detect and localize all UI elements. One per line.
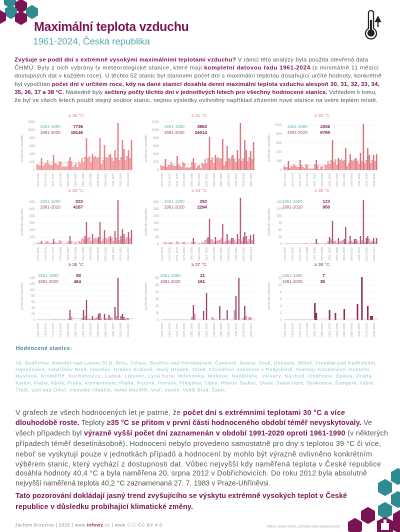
chart: days at or above 34 °C: 1991-2020 xyxy=(164,204,185,210)
chart: days at or above 36 °C: 120 xyxy=(29,282,35,286)
chart: days at or above 33 °C: 2001-2005 xyxy=(96,247,100,261)
chart: days at or above 31 °C: 1966-1970 xyxy=(167,173,171,187)
chart: days at or above 36 °C: 2016-2020 xyxy=(118,323,122,337)
chart: days at or above 37 °C: 50 xyxy=(155,283,159,287)
chart: days at or above 32 °C: 2016-2020 xyxy=(364,173,368,187)
chart: days at or above 38 °C: 2011-2015 xyxy=(357,323,361,337)
chart: days at or above 36 °C: 140 xyxy=(29,276,35,280)
chart: days at or above 31 °C: 1991-2020 xyxy=(164,130,185,135)
chart: days at or above 31 °C: 2021-2024 xyxy=(249,173,253,187)
chart: days at or above 32 °C: 2008 xyxy=(320,124,331,129)
chart: days at or above 34 °C: 1991-1995 xyxy=(204,247,208,261)
chart: days at or above 32 °C: 1971-1975 xyxy=(298,173,302,187)
stations heading: Hodnocené stanice: xyxy=(16,346,72,352)
chart: days at or above 38 °C: 2016-2020 xyxy=(364,323,368,337)
chart: days at or above 38 °C: počet dní (součet) xyxy=(267,282,271,310)
chart: days at or above 35 °C: 125 xyxy=(276,207,282,211)
chart: days at or above 37 °C: 1991-1995 xyxy=(204,323,208,337)
chart: days at or above 35 °C: 150 xyxy=(276,200,282,204)
chart: days at or above 34 °C: 150 xyxy=(153,221,159,225)
chart: days at or above 31 °C: počet dní (součet) xyxy=(144,134,148,162)
chart: days at or above 34 °C: 1961-1990 xyxy=(164,199,185,204)
stations list: Aš, Bedřichov, Brandýs nad Labem-St.B, Brno, Tuřany, Bystřice nad Pernštejnem, Čeminné, Desná, Souš, Doksany, Dříteč, Frenštát pod Radhoštěm, xyxy=(16,360,376,366)
chart: days at or above 34 °C: 1971-1975 xyxy=(175,247,179,261)
chart: days at or above 36 °C: 1961-1965 xyxy=(36,323,40,337)
chart: days at or above 33 °C: 2006-2010 xyxy=(104,247,108,261)
chart: days at or above 35 °C: 1971-1975 xyxy=(298,247,302,261)
chart: days at or above 37 °C: 161 xyxy=(198,279,206,284)
chart: days at or above 33 °C: 1986-1990 xyxy=(74,247,78,261)
title: Maximální teplota vzduchu xyxy=(34,20,189,34)
chart: days at or above 30 °C: 1986-1990 xyxy=(74,173,78,187)
intro text block: ČHMÚ. Byly z nich vybrány ty meteorologické stanice, které mají kompletní datovou řadu 1961-2024 (s minimálně 11 měsíci xyxy=(14,64,378,72)
chart: days at or above 33 °C: ≥ 33 °C xyxy=(68,188,84,193)
chart: days at or above 34 °C: 1961-1965 xyxy=(160,247,164,261)
chart: days at or above 32 °C: 1966-1970 xyxy=(290,173,294,187)
conclusions text block: dosáhla hodnoty 40,4 °C a byla naměřena 20. srpna 2012 v Dobřichovicích. Do roku 2012 byla absolutně xyxy=(16,469,367,478)
chart: days at or above 38 °C: 1976-1980 xyxy=(305,323,309,337)
chart: days at or above 31 °C: 1200 xyxy=(152,120,159,124)
chart: days at or above 38 °C: 0 xyxy=(280,318,282,322)
closing statement: Tato pozorování dokládají jasný trend zvyšujícího se výskytu extrémně vysokých teplot v České xyxy=(16,491,347,500)
chart: days at or above 30 °C: 2006-2010 xyxy=(104,173,108,187)
chart: days at or above 33 °C: 922 xyxy=(76,199,84,204)
chart: days at or above 37 °C: 30 xyxy=(155,297,159,301)
chart: days at or above 35 °C: 1991-2020 xyxy=(282,204,303,210)
chart: days at or above 38 °C: 1961-1990 xyxy=(282,273,303,278)
chart: days at or above 36 °C: 1991-2020 xyxy=(38,279,59,284)
chart: days at or above 35 °C: 1976-1980 xyxy=(305,247,309,261)
chart: days at or above 33 °C: počet dní (součet) xyxy=(20,208,24,236)
chart: days at or above 30 °C: 7736 xyxy=(73,124,84,129)
chart: days at or above 31 °C: 1976-1980 xyxy=(182,173,186,187)
chart: days at or above 31 °C: 2011-2015 xyxy=(234,173,238,187)
chart: days at or above 38 °C: 12 xyxy=(278,276,282,280)
chart: days at or above 36 °C: 2001-2005 xyxy=(96,323,100,337)
chart: days at or above 35 °C: 1961-1990 xyxy=(282,199,303,204)
chart: days at or above 31 °C: 1961-1990 xyxy=(164,124,185,129)
intro text block: že byl ve všech letech použit stejný soubor stanic, nejsou výsledky ovlivněny například zřízením nové stanice na velmi teplém místě. xyxy=(14,98,378,104)
chart: days at or above 36 °C: 1986-1990 xyxy=(74,323,78,337)
chart: days at or above 38 °C: 1991-2020 xyxy=(282,279,303,284)
chart: days at or above 37 °C: 1976-1980 xyxy=(182,323,186,337)
chart: days at or above 34 °C: 2021-2024 xyxy=(249,247,253,261)
chart: days at or above 37 °C: 40 xyxy=(155,290,159,294)
chart: days at or above 31 °C: 1986-1990 xyxy=(197,173,201,187)
intro text block xyxy=(14,58,382,104)
chart: days at or above 30 °C: 800 xyxy=(29,136,35,140)
chart: days at or above 38 °C: 35 xyxy=(320,279,326,284)
chart: days at or above 32 °C: 200 xyxy=(276,159,282,163)
chart: days at or above 31 °C: 1996-2000 xyxy=(212,173,216,187)
intro text block: dostupných dat v každém roce). U těchto 52 stanic byl stanoven počet dní s maximální teplotou dosahující určité hodnoty, konkrétně xyxy=(14,74,382,80)
chart: days at or above 30 °C: 2021-2024 xyxy=(126,173,130,187)
chart: days at or above 32 °C: 600 xyxy=(276,141,282,145)
chart: days at or above 37 °C: počet dní (součet) xyxy=(144,282,148,310)
chart: days at or above 35 °C: počet dní (součet) xyxy=(267,208,271,236)
chart: days at or above 32 °C: 2006-2010 xyxy=(350,173,354,187)
chart: days at or above 38 °C: 1986-1990 xyxy=(320,323,324,337)
chart: days at or above 30 °C: ≥ 30 °C xyxy=(68,113,84,118)
chart: days at or above 33 °C: 300 xyxy=(29,221,35,225)
chart: days at or above 34 °C xyxy=(144,188,255,261)
chart: days at or above 35 °C: 956 xyxy=(323,204,331,210)
chart: days at or above 35 °C: 1986-1990 xyxy=(320,247,324,261)
chart: days at or above 32 °C: počet dní (součet) xyxy=(267,134,271,162)
chart: days at or above 30 °C: 400 xyxy=(29,152,35,156)
chart: days at or above 37 °C: 2001-2005 xyxy=(219,323,223,337)
chart: days at or above 36 °C: 60 xyxy=(31,300,35,304)
chart: days at or above 35 °C: 1966-1970 xyxy=(290,247,294,261)
chart: days at or above 36 °C: 2011-2015 xyxy=(111,323,115,337)
chart: days at or above 34 °C: 100 xyxy=(153,228,159,232)
chart: days at or above 30 °C: 2001-2005 xyxy=(96,173,100,187)
chart: days at or above 32 °C: 1991-2020 xyxy=(287,130,308,135)
chart: days at or above 33 °C: 1961-1990 xyxy=(40,199,61,204)
chart: days at or above 32 °C: 1981-1985 xyxy=(313,173,317,187)
stations list: Karlov, Praha, Kbely, Praha, Klementinum, Praha, Ruzyně, Pernink, Přibyslav, Tábor, Přerov, Sedlec, Slané, Svatá Hora, Strakonice, Šumperk, Tábor, xyxy=(16,380,375,386)
hexagon cluster top left xyxy=(0,0,38,25)
chart: days at or above 34 °C: 200 xyxy=(153,214,159,218)
conclusions text block: neboť se vyskytují pouze v jednotkách případů a hodnocení by mohlo být výrazně ovlivněno konkrétním xyxy=(16,449,372,458)
chart: days at or above 31 °C: 400 xyxy=(153,152,159,156)
chart: days at or above 34 °C: 1996-2000 xyxy=(212,247,216,261)
chart: days at or above 33 °C: 100 xyxy=(29,235,35,239)
chart: days at or above 35 °C: ≥ 35 °C xyxy=(314,188,330,193)
chart: days at or above 35 °C: 100 xyxy=(276,214,282,218)
chart: days at or above 33 °C: 600 xyxy=(29,200,35,204)
chart: days at or above 32 °C: 2001-2005 xyxy=(342,173,346,187)
chart: days at or above 31 °C: 0 xyxy=(157,168,159,172)
chart: days at or above 32 °C: 2011-2015 xyxy=(357,173,361,187)
chart: days at or above 35 °C: 1981-1985 xyxy=(313,247,317,261)
chart: days at or above 32 °C xyxy=(267,113,378,187)
chart: days at or above 34 °C: 2006-2010 xyxy=(227,247,231,261)
chart: days at or above 38 °C: 6 xyxy=(280,297,282,301)
chart: days at or above 36 °C: ≥ 36 °C xyxy=(68,262,84,267)
chart: days at or above 37 °C: 1996-2000 xyxy=(212,323,216,337)
chart: days at or above 31 °C: 800 xyxy=(153,136,159,140)
chart: days at or above 30 °C: počet dní (součet) xyxy=(20,134,24,162)
chart: days at or above 34 °C: 2001-2005 xyxy=(219,247,223,261)
chart: days at or above 34 °C: počet dní (součet) xyxy=(144,208,148,236)
chart: days at or above 38 °C: 1996-2000 xyxy=(335,323,339,337)
chart: days at or above 31 °C: 1961-1965 xyxy=(160,173,164,187)
chart: days at or above 37 °C: 1991-2020 xyxy=(160,279,181,284)
chart: days at or above 36 °C: 20 xyxy=(31,312,35,316)
chart: days at or above 37 °C: 0 xyxy=(157,318,159,322)
chart: days at or above 33 °C: 1996-2000 xyxy=(88,247,92,261)
chart: days at or above 37 °C: 20 xyxy=(155,304,159,308)
intro text block: 35, 36, 37 a 38 °C. Následně byly sečteny počty těchto dní v jednotlivých letech pro všechny hodnocené stanice. Vzhledem k tomu, xyxy=(14,90,377,96)
chart: days at or above 37 °C: ≥ 37 °C xyxy=(191,262,207,267)
chart: days at or above 37 °C: 21 xyxy=(200,273,206,278)
conclusions text block xyxy=(16,408,388,488)
chart: days at or above 31 °C: 3963 xyxy=(197,124,208,129)
chart: days at or above 32 °C: 1991-1995 xyxy=(327,173,331,187)
chart: days at or above 33 °C: 2016-2020 xyxy=(118,247,122,261)
chart: days at or above 36 °C xyxy=(20,262,133,337)
stations list xyxy=(16,360,376,393)
chart: days at or above 34 °C: 1981-1985 xyxy=(190,247,194,261)
chart: days at or above 36 °C: 1966-1970 xyxy=(44,323,48,337)
hexagon cluster bottom right xyxy=(348,468,400,532)
chart: days at or above 35 °C: 123 xyxy=(323,199,331,204)
icon: logo mark xyxy=(381,520,389,530)
chart: days at or above 32 °C: 800 xyxy=(276,132,282,136)
chart: days at or above 30 °C: 1981-1985 xyxy=(66,173,70,187)
chart: days at or above 30 °C: 1976-1980 xyxy=(58,173,62,187)
chart: days at or above 35 °C: 25 xyxy=(278,235,282,239)
chart: days at or above 31 °C: 2016-2020 xyxy=(241,173,245,187)
chart: days at or above 36 °C: počet dní (součet) xyxy=(20,282,24,310)
chart: days at or above 36 °C: 80 xyxy=(31,294,35,298)
chart: days at or above 36 °C: 1976-1980 xyxy=(58,323,62,337)
conclusions text block: výběrem stanic, který vychází z dostupnosti dat. Vůbec nejvyšší kdy naměřená teplota v České republice xyxy=(16,460,381,468)
chart: days at or above 30 °C: 600 xyxy=(29,144,35,148)
chart: days at or above 32 °C: 6769 xyxy=(320,130,331,135)
chart: days at or above 37 °C: 1961-1990 xyxy=(160,273,181,278)
chart: days at or above 33 °C: 400 xyxy=(29,214,35,218)
chart: days at or above 30 °C: 1000 xyxy=(28,128,35,132)
chart: days at or above 36 °C: 464 xyxy=(74,279,82,284)
chart: days at or above 35 °C: 1961-1965 xyxy=(283,247,287,261)
chart: days at or above 38 °C: 1991-1995 xyxy=(327,323,331,337)
chart: days at or above 30 °C: 1961-1965 xyxy=(36,173,40,187)
chart: days at or above 37 °C: 60 xyxy=(155,276,159,280)
chart: days at or above 31 °C: 2001-2005 xyxy=(219,173,223,187)
intro text block: byl vypočítán počet dní v určitém roce, kdy na dané stanici dosáhla denní maximální teplota vzduchu alespoň 30, 31, 32, 33, 34, xyxy=(14,82,380,88)
chart: days at or above 35 °C: 2021-2024 xyxy=(372,247,376,261)
chart: days at or above 35 °C: 2011-2015 xyxy=(357,247,361,261)
chart: days at or above 38 °C: 1966-1970 xyxy=(290,323,294,337)
chart: days at or above 37 °C: 10 xyxy=(155,311,159,315)
chart: days at or above 34 °C: 2016-2020 xyxy=(241,247,245,261)
chart: days at or above 32 °C: 1996-2000 xyxy=(335,173,339,187)
chart: days at or above 30 °C: 1961-1990 xyxy=(40,124,61,129)
chart: days at or above 35 °C: 0 xyxy=(280,242,282,246)
closing statement: republice v důsledku probíhající klimatické změny. xyxy=(16,502,193,511)
chart: days at or above 36 °C: 100 xyxy=(29,288,35,292)
chart: days at or above 33 °C: 1966-1970 xyxy=(44,247,48,261)
chart: days at or above 30 °C: 1991-2020 xyxy=(40,130,61,135)
chart: days at or above 33 °C: 1961-1965 xyxy=(36,247,40,261)
chart: days at or above 36 °C: 0 xyxy=(33,318,35,322)
chart: days at or above 31 °C: 200 xyxy=(153,160,159,164)
chart: days at or above 34 °C: ≥ 34 °C xyxy=(191,188,207,193)
chart: days at or above 36 °C: 1996-2000 xyxy=(88,323,92,337)
chart: days at or above 31 °C: 1000 xyxy=(152,128,159,132)
conclusions text block: dlouhodobě roste. Teploty ≥35 °C se přitom v první části hodnoceného období téměř nevyskytovaly. Ve xyxy=(16,418,372,427)
chart: days at or above 38 °C xyxy=(267,262,378,337)
chart: days at or above 33 °C xyxy=(20,188,133,261)
chart: days at or above 35 °C: 75 xyxy=(278,221,282,225)
chart: days at or above 37 °C: 2016-2020 xyxy=(241,323,245,337)
chart: days at or above 32 °C: 1961-1990 xyxy=(287,124,308,129)
chart: days at or above 31 °C: 16014 xyxy=(195,130,208,135)
chart: days at or above 33 °C: 4167 xyxy=(73,204,84,210)
chart: days at or above 33 °C: 500 xyxy=(29,207,35,211)
chart: days at or above 34 °C: 2011-2015 xyxy=(234,247,238,261)
chart: days at or above 33 °C: 1976-1980 xyxy=(58,247,62,261)
chart: days at or above 37 °C: 1966-1970 xyxy=(167,323,171,337)
chart: days at or above 33 °C: 1991-1995 xyxy=(81,247,85,261)
footer source url: https://www.chmi.cz/historicka-data/pocasi xyxy=(267,524,340,528)
chart: days at or above 31 °C: 600 xyxy=(153,144,159,148)
chart: days at or above 34 °C: 1986-1990 xyxy=(197,247,201,261)
stations list: Třešť, Ústí nad Orlicí, Vizovské Hřebčín, Velké Meziříčí, Vrať, Vsetín, Vyšší Brod, Žatec. xyxy=(16,385,227,393)
chart: days at or above 35 °C: 2001-2005 xyxy=(342,247,346,261)
chart: days at or above 31 °C: 1991-1995 xyxy=(204,173,208,187)
closing statement xyxy=(16,491,347,511)
chart: days at or above 34 °C: 2294 xyxy=(197,204,208,210)
chart: days at or above 36 °C: 50 xyxy=(76,273,82,278)
chart: days at or above 32 °C: 1976-1980 xyxy=(305,173,309,187)
chart: days at or above 32 °C: 1961-1965 xyxy=(283,173,287,187)
chart: days at or above 36 °C: 1971-1975 xyxy=(51,323,55,337)
chart: days at or above 35 °C: 1996-2000 xyxy=(335,247,339,261)
chart: days at or above 36 °C: 40 xyxy=(31,306,35,310)
chart: days at or above 38 °C: 8 xyxy=(280,290,282,294)
chart: days at or above 38 °C: 7 xyxy=(323,273,326,278)
conclusions text block: všech případech byl výrazně vyšší počet dní zaznamenán v období 1991-2020 oproti 1961-1990 (v některých xyxy=(16,429,388,438)
chart: days at or above 34 °C: 250 xyxy=(153,207,159,211)
footer credit: Jáchym Brzezina | 2025 | www.infoviz.cz | www ⓒⓘ CC BY 4.0 xyxy=(15,522,162,528)
chart: days at or above 38 °C: 10 xyxy=(278,283,282,287)
chart: days at or above 31 °C: 2006-2010 xyxy=(227,173,231,187)
chart: days at or above 32 °C: 400 xyxy=(276,150,282,154)
chart: days at or above 33 °C: 0 xyxy=(33,242,35,246)
chart: days at or above 30 °C: 19146 xyxy=(71,130,84,135)
chart: days at or above 32 °C: 1986-1990 xyxy=(320,173,324,187)
chart: days at or above 30 °C: 2011-2015 xyxy=(111,173,115,187)
chart: days at or above 38 °C: 1971-1975 xyxy=(298,323,302,337)
chart: days at or above 30 °C: 0 xyxy=(33,168,35,172)
chart: days at or above 37 °C: 1986-1990 xyxy=(197,323,201,337)
chart: days at or above 36 °C: 1981-1985 xyxy=(66,323,70,337)
chart: days at or above 34 °C: 0 xyxy=(157,242,159,246)
chart: days at or above 37 °C: 1961-1965 xyxy=(160,323,164,337)
intro text block: Zvyšuje se podíl dní s extrémně vysokými maximálními teplotami vzduchu? V rámci této analýzy byla použita otevřená data xyxy=(14,58,369,64)
chart: days at or above 36 °C: 2021-2024 xyxy=(126,323,130,337)
chart: days at or above 38 °C: 1981-1985 xyxy=(313,323,317,337)
chart: days at or above 31 °C: 1981-1985 xyxy=(190,173,194,187)
chart: days at or above 37 °C: 2011-2015 xyxy=(234,323,238,337)
chart: days at or above 34 °C: 50 xyxy=(155,235,159,239)
chart: days at or above 35 °C: 1991-1995 xyxy=(327,247,331,261)
chart: days at or above 38 °C: ≥ 38 °C xyxy=(314,262,330,267)
chart: days at or above 38 °C: 2001-2005 xyxy=(342,323,346,337)
stations list: Myslová, Kroměříž, Kuchařovice, Ladná, Liberec, Lysá hora, Milešovka, Mošnov, Nedělišče, Velvary, Náchod, Ondřejov, Opava, Praha xyxy=(16,374,372,380)
chart: days at or above 36 °C: 1961-1990 xyxy=(38,273,59,278)
chart: days at or above 35 °C: 50 xyxy=(278,228,282,232)
chart: days at or above 34 °C: 300 xyxy=(153,200,159,204)
chart: days at or above 30 °C: 1971-1975 xyxy=(51,173,55,187)
chart: days at or above 30 °C: 2016-2020 xyxy=(118,173,122,187)
chart: days at or above 37 °C: 1971-1975 xyxy=(175,323,179,337)
chart: days at or above 38 °C: 2006-2010 xyxy=(350,323,354,337)
chart: days at or above 33 °C: 2011-2015 xyxy=(111,247,115,261)
chart: days at or above 37 °C xyxy=(144,262,255,337)
chart: days at or above 36 °C: 2006-2010 xyxy=(104,323,108,337)
chart: days at or above 33 °C: 1971-1975 xyxy=(51,247,55,261)
chart: days at or above 35 °C xyxy=(267,188,378,261)
chart: days at or above 34 °C: 1976-1980 xyxy=(182,247,186,261)
conclusions text block: případech téměř desetinásobně). Hodnocení nebylo provedeno samostatně pro dny s teplotou 39 °C či více, xyxy=(16,439,381,448)
chart: days at or above 33 °C: 200 xyxy=(29,228,35,232)
chart: days at or above 37 °C: 2006-2010 xyxy=(227,323,231,337)
chart: days at or above 30 °C: 1991-1995 xyxy=(81,173,85,187)
chart: days at or above 30 °C: 200 xyxy=(29,160,35,164)
chart: days at or above 38 °C: 1961-1965 xyxy=(283,323,287,337)
chart: days at or above 33 °C: 1991-2020 xyxy=(40,204,61,210)
icon: thermometer with up arrow xyxy=(365,11,380,39)
chart: days at or above 30 °C: 1996-2000 xyxy=(88,173,92,187)
chart: days at or above 32 °C: 1000 xyxy=(275,123,282,127)
chart: days at or above 32 °C: 2021-2024 xyxy=(372,173,376,187)
chart: days at or above 33 °C: 2021-2024 xyxy=(126,247,130,261)
chart: days at or above 31 °C xyxy=(144,113,255,187)
chart: days at or above 31 °C: ≥ 31 °C xyxy=(191,113,207,118)
chart: days at or above 34 °C: 1966-1970 xyxy=(167,247,171,261)
chart: days at or above 35 °C: 2006-2010 xyxy=(350,247,354,261)
chart: days at or above 37 °C: 2021-2024 xyxy=(249,323,253,337)
chart: days at or above 34 °C: 350 xyxy=(200,199,208,204)
chart: days at or above 38 °C: 2 xyxy=(280,311,282,315)
chart: days at or above 38 °C: 4 xyxy=(280,304,282,308)
chart: days at or above 35 °C: 2016-2020 xyxy=(364,247,368,261)
chart: days at or above 33 °C: 1981-1985 xyxy=(66,247,70,261)
chart: days at or above 30 °C xyxy=(20,113,133,187)
chart: days at or above 30 °C: 1200 xyxy=(28,120,35,124)
chart: days at or above 36 °C: 1991-1995 xyxy=(81,323,85,337)
chart: days at or above 38 °C: 2021-2024 xyxy=(372,323,376,337)
chart: days at or above 37 °C: 1981-1985 xyxy=(190,323,194,337)
conclusions text block: V grafech ze všech hodnocených let je patrné, že počet dní s extrémními teplotami 30 °C a více xyxy=(16,408,345,417)
subtitle: 1961-2024, Česká republika xyxy=(33,36,151,48)
conclusions text block: nejvyšší naměřená teplota 40,2 °C zaznamenaná 27. 7. 1983 v Praze-Uhříněvsi. xyxy=(16,479,270,488)
stations list: Hanušovice, Havlíčkův Brod, Hazelov, Hradec Králové, Nový Hrádek, Cheb, Churáňov, Jablonné v Podještědí, Klatovy, Kocelovice, Kostelní xyxy=(16,366,370,373)
chart: days at or above 31 °C: 1971-1975 xyxy=(175,173,179,187)
chart: days at or above 32 °C: 0 xyxy=(280,168,282,172)
chart: days at or above 32 °C: ≥ 32 °C xyxy=(314,113,330,118)
chart: days at or above 30 °C: 1966-1970 xyxy=(44,173,48,187)
